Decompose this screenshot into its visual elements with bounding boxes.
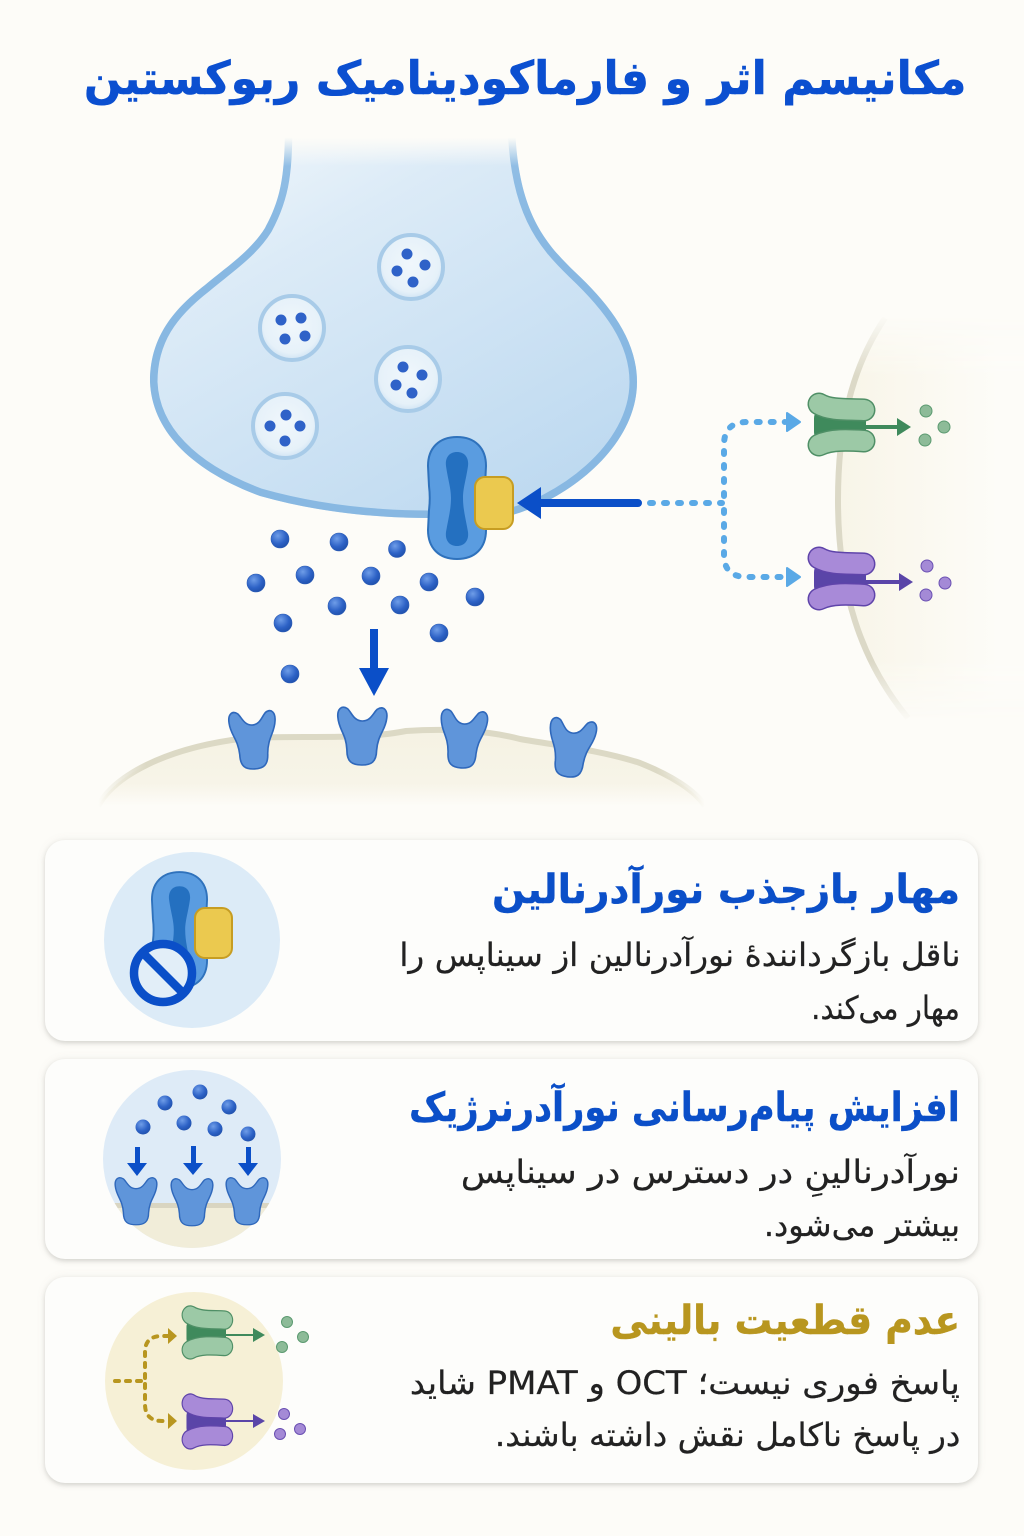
panel: clinical uncertainty [45,1277,978,1483]
noradrenaline molecules [247,530,484,683]
icon: alternative transporters [105,1292,309,1470]
body text: پاسخ فوری نیست؛ OCT و PMAT شاید [410,1364,960,1402]
noradrenaline transporter [428,437,486,559]
heading: افزایش پیام‌رسانی نورآدرنرژیک [409,1085,960,1131]
panel: increased signaling [45,1059,978,1259]
arrow: inhibition [517,487,642,519]
body text line 2: بیشتر می‌شود. [764,1206,960,1244]
panel: reuptake inhibition [45,840,978,1041]
reboxetine blocker [475,477,513,529]
postsynaptic membrane [98,730,705,806]
arrow: release down [359,629,389,696]
body text: ناقل بازگردانندهٔ نورآدرنالین از سیناپس را [399,936,960,974]
target neuron membrane [835,326,920,712]
vesicles [253,235,443,458]
icon: receptors and molecules [103,1070,281,1248]
heading: عدم قطعیت بالینی [610,1298,960,1344]
title: مکانیسم اثر و فارماکودینامیک ربوکستین [84,51,966,105]
transporter: PMAT purple [814,558,951,601]
icon: blocked transporter [104,852,280,1028]
transporter: OCT green [814,404,950,446]
body text line 2: در پاسخ ناکامل نقش داشته باشند. [494,1416,960,1454]
arrow: dotted branches to OCT and PMAT [650,413,800,586]
presynaptic terminal [150,114,637,518]
synapse diagram [102,140,952,802]
postsynaptic receptors [228,707,597,780]
body text line 2: مهار می‌کند. [811,989,960,1027]
heading: مهار بازجذب نورآدرنالین [492,867,960,913]
body text: نورآدرنالینِ در دسترس در سیناپس [461,1153,960,1191]
